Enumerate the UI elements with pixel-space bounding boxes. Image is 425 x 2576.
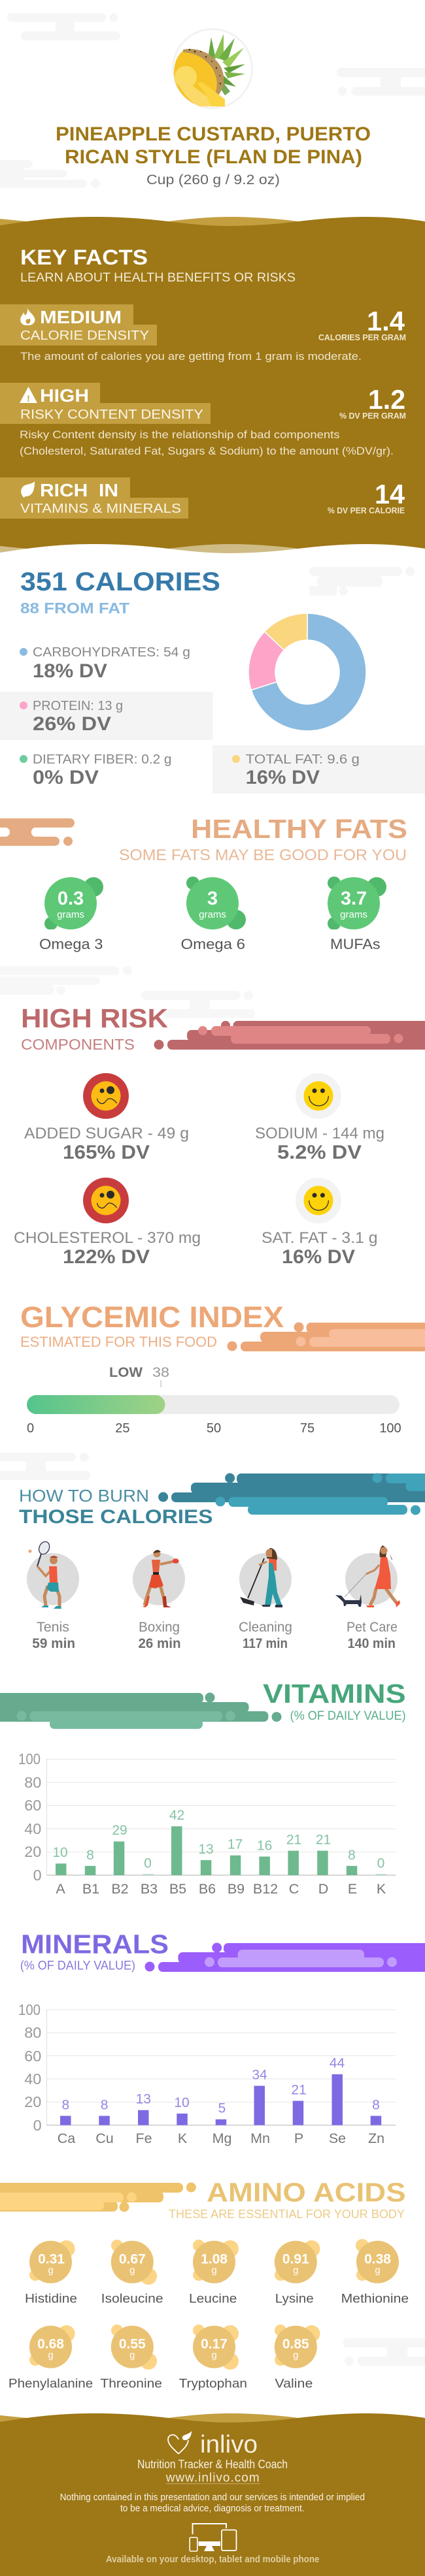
activity: cleaning	[239, 1548, 292, 1651]
x axis labels: Zn	[368, 2131, 384, 2146]
subheading: 88 FROM FAT	[20, 600, 129, 617]
subheading: (% OF DAILY VALUE)	[20, 1959, 135, 1973]
gauge label: 38	[152, 1365, 169, 1380]
subheading: (% OF DAILY VALUE)	[290, 1709, 406, 1723]
y axis labels: 0	[33, 2117, 42, 2134]
icon: tennis player	[29, 1540, 61, 1609]
title	[56, 123, 371, 168]
label: MEDIUM	[40, 307, 122, 327]
cloud decoration	[0, 1693, 281, 1722]
heading: KEY FACTS	[20, 246, 148, 269]
amino: methionine	[341, 2239, 409, 2306]
heading: GLYCEMIC INDEX	[20, 1300, 284, 1334]
panel: how to burn those calories	[19, 1473, 425, 1651]
fat: omega 6: Omega 6	[180, 936, 245, 952]
pineapple leaves	[208, 34, 245, 95]
amino: lysine	[275, 2240, 320, 2306]
logo	[168, 2431, 258, 2458]
risk: added sugar	[24, 1073, 189, 1163]
cloud decoration	[0, 2183, 196, 2212]
amino: histidine: 0.31	[38, 2252, 65, 2267]
risk: sodium: SODIUM - 144 mg	[255, 1125, 384, 1142]
amino: methionine: Methionine	[341, 2292, 409, 2306]
tagline: Nutrition Tracker & Health Coach	[137, 2458, 288, 2471]
fat: omega 3	[39, 877, 103, 952]
disclaimer: Nothing contained in this presentation and our services is intended or implied	[60, 2492, 365, 2503]
legend: protein: 26% DV	[33, 713, 111, 735]
background clouds: header	[0, 13, 425, 188]
bar values: 0	[144, 1856, 152, 1871]
panel: minerals	[18, 1929, 425, 2146]
activity: boxing: 26 min	[139, 1636, 180, 1651]
x axis labels: B2	[111, 1881, 129, 1897]
y axis labels: 40	[24, 1820, 41, 1837]
amino: threonine: g	[129, 2350, 135, 2361]
bar values: 8	[61, 2098, 69, 2112]
fact: rich in vitamins and minerals	[0, 477, 405, 519]
disclaimer: to be a medical advice, diagnosis or treatment.	[120, 2503, 305, 2514]
amino: threonine	[100, 2325, 162, 2391]
fact: risky content density	[0, 383, 406, 457]
amino: isoleucine: Isoleucine	[101, 2292, 163, 2306]
amino: histidine	[25, 2240, 77, 2306]
bar values: 44	[330, 2056, 345, 2070]
bar values: 21	[316, 1833, 331, 1847]
activity: cleaning: 117 min	[243, 1636, 288, 1651]
x axis labels: Cu	[95, 2131, 114, 2146]
bars	[60, 2074, 381, 2125]
pineapple slice	[174, 50, 222, 105]
bar values: 16	[257, 1838, 272, 1854]
background cloud: burn	[0, 1453, 90, 1480]
grid lines	[46, 1759, 396, 1875]
description	[20, 429, 394, 457]
bar values: 10	[52, 1845, 68, 1860]
activity: pet care	[335, 1545, 400, 1651]
fat: mufas: 3.7	[341, 888, 367, 909]
cloud decoration	[158, 1473, 425, 1502]
amino: isoleucine: g	[129, 2265, 135, 2276]
heading: 351 CALORIES	[20, 568, 220, 596]
bar chart: minerals	[18, 2001, 396, 2146]
x axis labels	[56, 1881, 386, 1897]
x axis labels: C	[289, 1881, 299, 1897]
bar values: 21	[286, 1833, 301, 1847]
pineapple skin	[183, 49, 224, 96]
x axis labels: B5	[169, 1881, 186, 1897]
sublabel: CALORIE DENSITY	[20, 329, 149, 343]
subheading: SOME FATS MAY BE GOOD FOR YOU	[119, 846, 407, 864]
fat: omega 3: Omega 3	[39, 936, 103, 952]
value: 1.4	[367, 306, 405, 336]
heading line 1: HOW TO BURN	[19, 1486, 149, 1505]
subheading: LEARN ABOUT HEALTH BENEFITS OR RISKS	[20, 271, 296, 285]
activity: pet care: Pet Care	[347, 1620, 398, 1635]
food image: pineapple	[173, 29, 252, 108]
icon: boxer	[143, 1550, 179, 1607]
amino: valine: Valine	[275, 2377, 313, 2391]
activity: boxing: Boxing	[139, 1620, 180, 1635]
gauge label	[109, 1365, 169, 1387]
disclaimer	[60, 2492, 365, 2514]
amino: methionine: g	[375, 2265, 381, 2276]
y axis labels: 0	[33, 1867, 42, 1884]
amino: tryptophan: g	[211, 2350, 217, 2361]
activity: tennis: 59 min	[32, 1636, 75, 1651]
value: 14	[375, 479, 405, 509]
legend: total fat	[232, 752, 360, 788]
amino: valine: 0.85	[282, 2337, 309, 2352]
unit: % DV PER GRAM	[339, 411, 406, 421]
bar values: 8	[348, 1848, 356, 1863]
cloud decoration	[228, 1322, 425, 1351]
bar values: 42	[169, 1808, 184, 1823]
bar values: 21	[291, 2082, 307, 2098]
y axis labels: 80	[24, 1774, 41, 1791]
value: 1.2	[368, 384, 405, 415]
amino: lysine: Lysine	[275, 2292, 314, 2306]
activity: tennis: Tenis	[37, 1620, 69, 1635]
cloud decoration	[309, 567, 415, 596]
x axis labels: B12	[253, 1881, 278, 1897]
subheading: THESE ARE ESSENTIAL FOR YOUR BODY	[169, 2208, 405, 2221]
unit: CALORIES PER GRAM	[318, 332, 406, 342]
risk: cholesterol: CHOLESTEROL - 370 mg	[14, 1229, 201, 1247]
fat: omega 3: 0.3	[58, 888, 84, 909]
x axis labels: Ca	[58, 2131, 75, 2146]
x axis labels: B1	[82, 1881, 99, 1897]
fat: omega 3: grams	[57, 909, 84, 920]
description: (Cholesterol, Saturated Fat, Sugars & Sodium) to the amount (%DV/gr).	[20, 445, 394, 457]
description: Risky Content density is the relationship of bad components	[20, 429, 340, 441]
amino: histidine: Histidine	[25, 2292, 77, 2306]
sublabel: VITAMINS & MINERALS	[20, 502, 181, 516]
bar values: 0	[377, 1856, 384, 1871]
fat: omega 6: 3	[207, 888, 218, 909]
background cloud: amino	[343, 2338, 425, 2366]
serving size: Cup (260 g / 9.2 oz)	[146, 172, 280, 187]
x axis labels: K	[178, 2131, 188, 2146]
amino: valine: g	[293, 2350, 298, 2361]
amino: tryptophan: 0.17	[201, 2337, 228, 2352]
y axis labels: 100	[18, 2001, 41, 2018]
fat: omega 6: grams	[199, 909, 226, 920]
x axis labels: Fe	[135, 2131, 152, 2146]
icon: flame	[20, 308, 35, 325]
wave top	[0, 217, 425, 236]
bar values: 10	[174, 2095, 190, 2110]
y axis labels: 60	[24, 1797, 41, 1814]
heading: HIGH RISK	[21, 1003, 168, 1033]
wave bottom	[0, 544, 425, 557]
amino: phenylalanine: 0.68	[37, 2337, 64, 2352]
gauge scale: 0	[27, 1421, 34, 1436]
donut chart	[248, 613, 366, 731]
legend: protein	[20, 698, 123, 735]
panel: key facts	[0, 217, 425, 557]
icon: heart and leaf	[168, 2431, 192, 2454]
fat: mufas	[328, 877, 386, 952]
activity: boxing	[133, 1550, 185, 1651]
y axis labels: 20	[24, 2093, 41, 2110]
legend: carbohydrates: 18% DV	[33, 660, 107, 682]
y axis labels: 80	[24, 2024, 41, 2041]
risk: added sugar: ADDED SUGAR - 49 g	[24, 1125, 189, 1142]
risk: saturated fat	[262, 1178, 378, 1268]
icon: devices	[190, 2524, 237, 2551]
amino: phenylalanine	[8, 2325, 93, 2391]
amino: phenylalanine: g	[48, 2350, 54, 2361]
risk: saturated fat: 16% DV	[282, 1246, 355, 1268]
risk: cholesterol: 122% DV	[63, 1246, 150, 1268]
x axis labels: B3	[141, 1881, 158, 1897]
wave	[0, 2413, 425, 2433]
amino: methionine: 0.38	[364, 2252, 391, 2267]
risk: sodium: 5.2% DV	[277, 1142, 362, 1163]
amino: leucine: Leucine	[189, 2292, 237, 2306]
x axis labels: Se	[329, 2131, 346, 2146]
subheading: ESTIMATED FOR THIS FOOD	[20, 1334, 217, 1350]
fact: risky content density: !	[27, 393, 30, 404]
x axis labels: A	[56, 1881, 65, 1897]
heading line 2: THOSE CALORIES	[19, 1506, 213, 1528]
y axis labels: 100	[18, 1750, 41, 1767]
panel: healthy fats	[0, 814, 407, 952]
label: RICH IN	[40, 480, 118, 500]
activity: pet care: 140 min	[348, 1636, 396, 1651]
y axis labels: 40	[24, 2070, 41, 2087]
x axis labels: P	[294, 2131, 303, 2146]
icon: person walking dog	[335, 1545, 400, 1607]
amino: leucine	[189, 2240, 239, 2306]
fat: omega 6	[180, 877, 246, 952]
y axis labels: 20	[24, 1843, 41, 1860]
risk: saturated fat: SAT. FAT - 3.1 g	[262, 1229, 378, 1247]
bar values	[61, 2056, 380, 2116]
amino: valine	[275, 2325, 320, 2391]
panel: vitamins	[0, 1679, 406, 1897]
gauge scale: 75	[300, 1421, 314, 1436]
cloud decoration	[0, 818, 75, 846]
bar values: 13	[136, 2091, 151, 2107]
icon: leaf	[21, 481, 35, 498]
amino: lysine: g	[293, 2265, 298, 2276]
bar values: 5	[218, 2101, 226, 2116]
amino: threonine: 0.55	[119, 2337, 146, 2352]
heading: AMINO ACIDS	[207, 2178, 406, 2208]
logo: inlivo	[200, 2431, 258, 2458]
bar chart: vitamins	[18, 1750, 396, 1897]
sublabel: RISKY CONTENT DENSITY	[20, 408, 203, 422]
heading: VITAMINS	[263, 1679, 406, 1709]
icon: warning	[20, 387, 37, 403]
amino: isoleucine	[101, 2240, 163, 2306]
legend: total fat: 16% DV	[246, 767, 320, 788]
panel: high risk	[14, 1003, 425, 1268]
gauge scale: 100	[379, 1421, 401, 1436]
bar values: 34	[252, 2068, 267, 2082]
gauge scale: 50	[207, 1421, 221, 1436]
bar values: 13	[198, 1842, 214, 1857]
legend: protein: PROTEIN: 13 g	[33, 698, 123, 713]
x axis labels: B6	[199, 1881, 216, 1897]
legend: carbohydrates: CARBOHYDRATES: 54 g	[33, 645, 190, 660]
legend: carbohydrates	[20, 645, 190, 682]
x axis labels: E	[348, 1881, 357, 1897]
y axis labels: 60	[24, 2048, 41, 2065]
bar values: 29	[112, 1823, 128, 1838]
bar values: 8	[86, 1848, 94, 1863]
fat: mufas: MUFAs	[330, 936, 381, 952]
cloud decoration	[145, 1942, 425, 1972]
availability note: Available on your desktop, tablet and mobile phone	[106, 2554, 319, 2565]
fact: calorie density	[0, 304, 406, 362]
gauge scale	[27, 1421, 401, 1436]
amino: tryptophan: Tryptophan	[179, 2377, 247, 2391]
amino: phenylalanine: Phenylalanine	[8, 2377, 93, 2391]
icon: person cleaning	[240, 1548, 282, 1607]
x axis labels: D	[318, 1881, 328, 1897]
fat: mufas: grams	[340, 909, 367, 920]
y axis labels	[18, 1750, 42, 1884]
panel: amino acids	[0, 2178, 425, 2391]
amino: lysine: 0.91	[282, 2252, 309, 2267]
amino: isoleucine: 0.67	[119, 2252, 146, 2267]
x axis labels: K	[377, 1881, 386, 1897]
subheading: COMPONENTS	[21, 1036, 135, 1053]
gauge bar	[27, 1395, 400, 1414]
gauge scale: 25	[115, 1421, 130, 1436]
grid lines	[46, 2010, 396, 2125]
background clouds: high risk	[0, 966, 255, 1018]
label: HIGH	[40, 385, 89, 406]
heading: MINERALS	[21, 1929, 169, 1959]
bar values: 8	[101, 2098, 108, 2112]
y axis labels	[18, 2001, 42, 2134]
legend: dietary fiber: 0% DV	[33, 767, 99, 788]
bar values	[52, 1808, 384, 1871]
cloud decoration	[154, 1021, 425, 1050]
pineapple wedges	[178, 80, 210, 106]
legend: dietary fiber: DIETARY FIBER: 0.2 g	[33, 752, 171, 767]
x axis labels: B9	[228, 1881, 245, 1897]
amino: leucine: g	[211, 2265, 217, 2276]
title: PINEAPPLE CUSTARD, PUERTO	[56, 123, 371, 145]
x axis labels: Mg	[212, 2131, 231, 2146]
amino: histidine: g	[48, 2265, 54, 2276]
bars	[56, 1826, 386, 1875]
bar values: 8	[372, 2098, 380, 2112]
activity: tennis	[27, 1540, 79, 1651]
panel: glycemic index	[20, 1300, 425, 1436]
risk: sodium	[255, 1073, 384, 1163]
risk: added sugar: 165% DV	[63, 1142, 150, 1163]
amino: tryptophan	[179, 2325, 247, 2391]
legend: total fat background	[212, 745, 425, 794]
website: www.inlivo.com	[165, 2471, 260, 2485]
amino: threonine: Threonine	[100, 2377, 162, 2391]
description: The amount of calories you are getting from 1 gram is moderate.	[20, 351, 362, 362]
title: RICAN STYLE (FLAN DE PINA)	[65, 146, 362, 168]
legend: total fat: TOTAL FAT: 9.6 g	[246, 752, 360, 767]
heading: HEALTHY FATS	[191, 814, 407, 844]
amino: leucine: 1.08	[201, 2252, 228, 2267]
x axis labels: Mn	[250, 2131, 270, 2146]
bar values: 17	[228, 1837, 243, 1852]
panel: calories	[0, 567, 425, 794]
activity: cleaning: Cleaning	[239, 1620, 292, 1635]
legend: dietary fiber	[20, 752, 171, 788]
unit: % DV PER CALORIE	[328, 506, 405, 515]
x axis labels	[58, 2131, 384, 2146]
gauge label: LOW	[109, 1365, 143, 1380]
legend: protein background	[0, 692, 213, 740]
panel: footer	[0, 2413, 425, 2576]
risk: cholesterol	[14, 1178, 201, 1268]
